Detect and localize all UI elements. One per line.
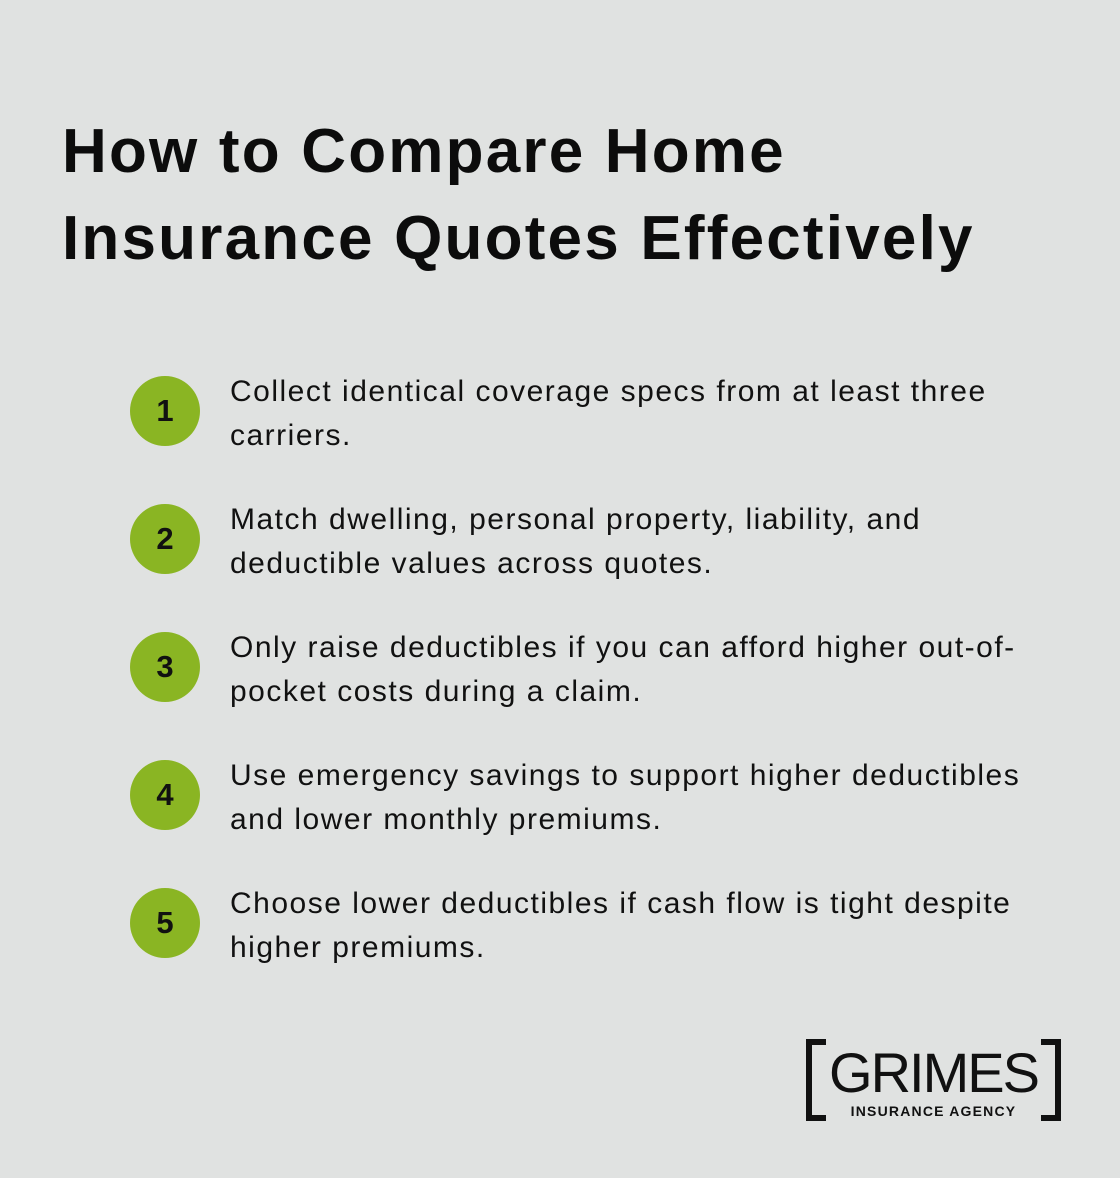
item 2 bbox=[130, 503, 921, 580]
item 2: 2 bbox=[156, 521, 174, 556]
item 1: carriers. bbox=[230, 419, 352, 452]
item 5: Choose lower deductibles if cash flow is tight despite bbox=[230, 887, 1011, 920]
item 4 bbox=[130, 759, 1020, 836]
item 5: higher premiums. bbox=[230, 931, 486, 964]
title: How to Compare Home bbox=[62, 117, 786, 186]
logo: GRIMES bbox=[829, 1041, 1038, 1104]
item 2: Match dwelling, personal property, liability, and bbox=[230, 503, 921, 536]
item 5: 5 bbox=[156, 905, 174, 940]
item 1: 1 bbox=[156, 393, 174, 428]
item 3: 3 bbox=[156, 649, 174, 684]
logo bbox=[806, 1039, 1061, 1121]
item 3 bbox=[130, 631, 1016, 708]
item 4: and lower monthly premiums. bbox=[230, 803, 662, 836]
item 4: Use emergency savings to support higher deductibles bbox=[230, 759, 1020, 792]
item 1: Collect identical coverage specs from at least three bbox=[230, 375, 987, 408]
item 3: pocket costs during a claim. bbox=[230, 675, 642, 708]
logo: INSURANCE AGENCY bbox=[851, 1103, 1016, 1119]
item 2: deductible values across quotes. bbox=[230, 547, 713, 580]
item 4: 4 bbox=[156, 777, 174, 812]
item 5 bbox=[130, 887, 1011, 964]
item 3: Only raise deductibles if you can afford higher out-of- bbox=[230, 631, 1016, 664]
title: Insurance Quotes Effectively bbox=[62, 204, 975, 273]
item 1 bbox=[130, 375, 987, 452]
title bbox=[62, 117, 975, 273]
